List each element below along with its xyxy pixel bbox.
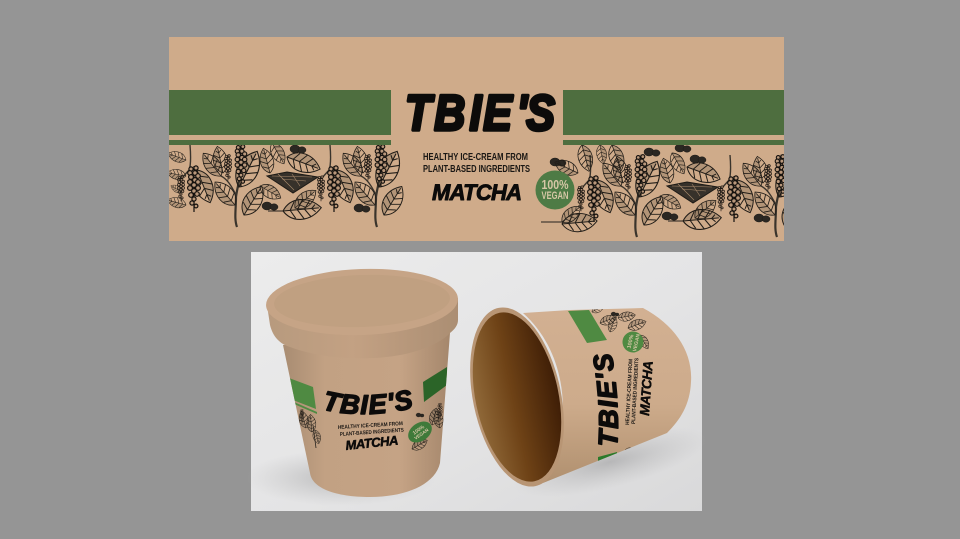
cup badge: 100% [412,424,426,436]
cup shadows [245,413,713,511]
cup tagline: PLANT-BASED INGREDIENTS [340,428,404,438]
botanical art right [412,402,444,450]
cup badge: 100% [627,334,635,349]
lid side [267,298,458,358]
green stripe left [289,378,316,409]
panel: cup mockup photo [251,252,702,511]
right green band [563,90,784,145]
cup title: TBIE'S [326,390,412,415]
cup badge: VEGAN [632,333,642,352]
badge: 100% vegan [536,170,574,210]
rim [455,299,579,495]
left botanical illustration [166,140,409,227]
lid recess [273,272,451,330]
cup flavour: MATCHA [637,360,656,416]
panel: flat packaging label [166,37,809,241]
cup badge [621,330,645,354]
left green band [169,90,391,145]
cup flavour: MATCHA [345,433,399,453]
tipped-over cup [470,308,692,486]
opening interior [459,304,575,490]
flavour name: MATCHA [432,180,522,205]
green stripe right [423,367,447,402]
upright cup with lid [266,268,458,497]
badge: 100% vegan: 100% [542,177,569,192]
cup badge [404,417,436,447]
right botanical illustration [541,145,784,238]
cup badge: VEGAN [413,427,429,441]
brand title: TBIE'S [405,85,555,141]
cup body [283,333,450,497]
green stripe bottom [598,452,617,461]
cup tagline: HEALTHY ICE-CREAM FROM [625,358,634,425]
cup tagline [625,358,640,425]
cup exterior [523,308,691,483]
cup title: TBIE'S [592,354,619,446]
cup tagline [338,421,404,438]
lid top [265,266,459,338]
label artwork on upright cup [289,367,447,453]
cup tagline: HEALTHY ICE-CREAM FROM [338,421,403,431]
badge: 100% vegan: VEGAN [542,190,569,202]
tagline: PLANT-BASED INGREDIENTS [423,163,530,175]
green stripe top [568,310,607,343]
botanical art left [298,409,321,448]
cup tagline: PLANT-BASED INGREDIENTS [631,358,640,424]
tagline: HEALTHY ICE-CREAM FROM [423,151,528,163]
botanical art [592,309,649,450]
artwork on tipped cup [568,302,652,463]
tagline [423,151,530,175]
